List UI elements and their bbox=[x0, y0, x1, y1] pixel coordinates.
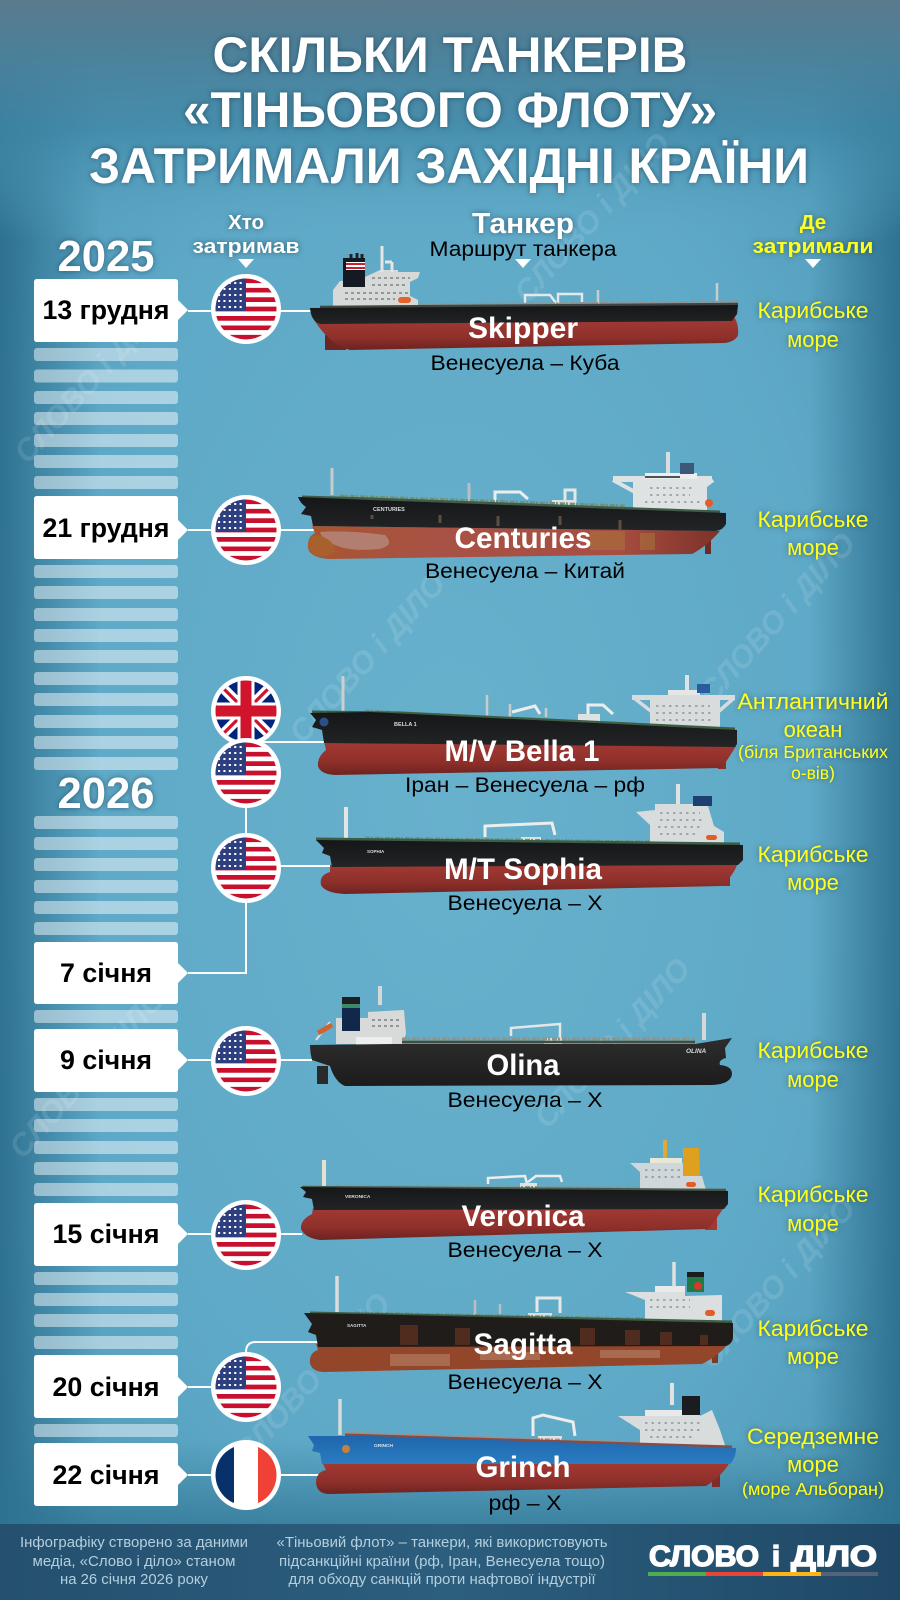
date: 9 січня: 9 січня bbox=[60, 1045, 152, 1075]
logo: і bbox=[772, 1541, 780, 1573]
year 2025: 2025 bbox=[58, 232, 154, 281]
column header: who detained: затримав bbox=[192, 235, 300, 258]
location: Caribbean 2 bbox=[758, 507, 868, 560]
column header: where detained: затримали bbox=[752, 235, 874, 258]
location: Caribbean 5: море bbox=[787, 1211, 839, 1236]
ship: Sagitta: Sagitta bbox=[474, 1328, 573, 1361]
route: Olina: Венесуела – Х bbox=[448, 1089, 602, 1112]
location: Caribbean 6: море bbox=[787, 1344, 839, 1369]
location: Caribbean 2: море bbox=[787, 535, 839, 560]
watermarks: СЛОВО і ДІЛО bbox=[2, 981, 172, 1165]
ship: M/T Sophia: SOPHIA bbox=[367, 849, 385, 854]
location: Caribbean 3: море bbox=[787, 870, 839, 895]
location: Caribbean 1 bbox=[758, 298, 868, 352]
logo: ДІЛО bbox=[791, 1541, 877, 1573]
location: Caribbean 6 bbox=[758, 1316, 868, 1369]
ship: Veronica: VERONICA bbox=[345, 1194, 371, 1200]
flag: USA bbox=[211, 1026, 281, 1096]
date: 22 січня bbox=[34, 1443, 188, 1506]
location: Caribbean 4: Карибське bbox=[758, 1038, 868, 1063]
title bbox=[89, 27, 809, 194]
footer: source bbox=[20, 1535, 248, 1588]
flag: USA bbox=[211, 738, 281, 808]
date: 21 грудня bbox=[34, 496, 188, 559]
footer: source: на 26 січня 2026 року bbox=[60, 1572, 209, 1588]
footer band bbox=[0, 1524, 900, 1600]
watermarks: СЛОВО і ДІЛО bbox=[527, 951, 697, 1135]
watermarks: СЛОВО і ДІЛО bbox=[692, 1191, 862, 1375]
date: 9 січня bbox=[34, 1029, 188, 1092]
location: Atlantic: (біля Британських bbox=[738, 742, 888, 762]
ship: Veronica bbox=[300, 1140, 728, 1240]
location: Mediterranean: Середземне bbox=[747, 1424, 879, 1449]
location: Caribbean 4: море bbox=[787, 1067, 839, 1092]
date: 15 січня: 15 січня bbox=[52, 1219, 160, 1249]
date: 13 грудня bbox=[34, 279, 188, 342]
route: Sagitta: Венесуела – Х bbox=[448, 1371, 602, 1394]
location: Caribbean 1: море bbox=[787, 327, 839, 352]
location: Atlantic: океан bbox=[784, 717, 842, 742]
flag: USA bbox=[211, 1352, 281, 1422]
location: Caribbean 4 bbox=[758, 1038, 868, 1092]
title: «ТІНЬОВОГО ФЛОТУ» bbox=[183, 82, 717, 138]
timeline stripes bbox=[34, 348, 178, 1437]
location: Mediterranean bbox=[742, 1424, 884, 1499]
date: 7 січня: 7 січня bbox=[60, 958, 152, 988]
footer: source: медіа, «Слово і діло» станом bbox=[32, 1554, 236, 1570]
location: Atlantic: о-вів) bbox=[791, 763, 835, 783]
date: 20 січня bbox=[34, 1355, 188, 1418]
date: 13 грудня: 13 грудня bbox=[42, 295, 170, 325]
ship: M/T Sophia bbox=[316, 784, 743, 894]
ship: Centuries bbox=[298, 452, 726, 559]
date: 20 січня: 20 січня bbox=[52, 1372, 160, 1402]
watermarks: СЛОВО і ДІЛО bbox=[7, 286, 177, 470]
watermarks: СЛОВО і ДІЛО bbox=[507, 126, 677, 310]
ship: Grinch: GRINCH bbox=[374, 1443, 393, 1449]
connector lines bbox=[188, 311, 333, 1475]
location: Caribbean 2: Карибське bbox=[758, 507, 868, 532]
logo bbox=[648, 1541, 878, 1576]
ship: Sagitta: SAGITTA bbox=[347, 1323, 367, 1328]
location: Caribbean 1: Карибське bbox=[758, 298, 868, 323]
logo: СЛОВО bbox=[649, 1541, 759, 1573]
flag: France bbox=[211, 1440, 281, 1510]
year 2026: 2026 bbox=[58, 769, 154, 818]
flag: UK bbox=[211, 676, 281, 746]
route: Skipper: Венесуела – Куба bbox=[430, 352, 620, 375]
date: 15 січня bbox=[34, 1203, 188, 1266]
column header: tanker and route: Танкер bbox=[472, 208, 574, 240]
ship: Grinch bbox=[308, 1383, 736, 1494]
flag: USA bbox=[211, 274, 281, 344]
ship: M/T Sophia: M/T Sophia bbox=[444, 853, 602, 886]
route: M/T Sophia: Венесуела – Х bbox=[448, 892, 602, 915]
footer: definition: «Тіньовий флот» – танкери, які використовують bbox=[276, 1535, 608, 1551]
location: Caribbean 3: Карибське bbox=[758, 842, 868, 867]
ship: M/V Bella 1: BELLA 1 bbox=[394, 722, 417, 728]
flag: USA bbox=[211, 1200, 281, 1270]
footer: definition: підсанкційні країни (рф, Іран, Венесуела тощо) bbox=[279, 1554, 605, 1570]
location: Mediterranean: (море Альборан) bbox=[742, 1479, 884, 1499]
watermarks: СЛОВО і ДІЛО bbox=[692, 526, 862, 710]
footer: source: Інфографіку створено за даними bbox=[20, 1535, 248, 1551]
column header: tanker and route bbox=[430, 208, 617, 268]
title: СКІЛЬКИ ТАНКЕРІВ bbox=[212, 27, 688, 83]
location: Atlantic bbox=[738, 689, 888, 783]
ship: Sagitta bbox=[304, 1262, 733, 1372]
ship: Centuries: CENTURIES bbox=[373, 507, 405, 513]
ship: Olina: Olina bbox=[486, 1049, 560, 1082]
date: 7 січня bbox=[34, 942, 188, 1004]
ship: Skipper bbox=[310, 246, 738, 350]
watermarks: СЛОВО і ДІЛО bbox=[227, 1286, 397, 1470]
column header: who detained: Хто bbox=[228, 211, 264, 234]
route: Centuries: Венесуела – Китай bbox=[425, 560, 625, 583]
flag: USA bbox=[211, 833, 281, 903]
ship: Olina bbox=[310, 986, 732, 1086]
route: Veronica: Венесуела – Х bbox=[448, 1239, 602, 1262]
flag: USA bbox=[211, 495, 281, 565]
watermarks: СЛОВО і ДІЛО bbox=[282, 566, 452, 750]
ship: Veronica: Veronica bbox=[462, 1200, 585, 1233]
route: M/V Bella 1: Іран – Венесуела – рф bbox=[405, 774, 645, 797]
column header: tanker and route: Маршрут танкера bbox=[430, 238, 617, 261]
column header: who detained bbox=[192, 211, 300, 268]
column header: where detained: Де bbox=[800, 211, 826, 234]
date: 21 грудня: 21 грудня bbox=[42, 513, 170, 543]
location: Caribbean 3 bbox=[758, 842, 868, 895]
ship: M/V Bella 1: M/V Bella 1 bbox=[444, 735, 600, 768]
ship: M/V Bella 1 bbox=[310, 675, 737, 775]
ship: Olina: OLINA bbox=[686, 1048, 707, 1055]
location: Mediterranean: море bbox=[787, 1452, 839, 1477]
location: Caribbean 5: Карибське bbox=[758, 1182, 868, 1207]
route: Grinch: рф – Х bbox=[488, 1492, 562, 1515]
ship: Grinch: Grinch bbox=[476, 1451, 570, 1484]
footer: definition bbox=[276, 1535, 608, 1588]
column header: where detained bbox=[752, 211, 874, 268]
title: ЗАТРИМАЛИ ЗАХІДНІ КРАЇНИ bbox=[89, 138, 809, 194]
footer: definition: для обходу санкцій проти нафтової індустрії bbox=[288, 1572, 596, 1588]
ship: Skipper: Skipper bbox=[468, 312, 578, 345]
date: 22 січня: 22 січня bbox=[52, 1460, 160, 1490]
location: Caribbean 6: Карибське bbox=[758, 1316, 868, 1341]
location: Caribbean 5 bbox=[758, 1182, 868, 1236]
ship: Centuries: Centuries bbox=[454, 522, 592, 555]
location: Atlantic: Антлантичний bbox=[738, 689, 888, 714]
